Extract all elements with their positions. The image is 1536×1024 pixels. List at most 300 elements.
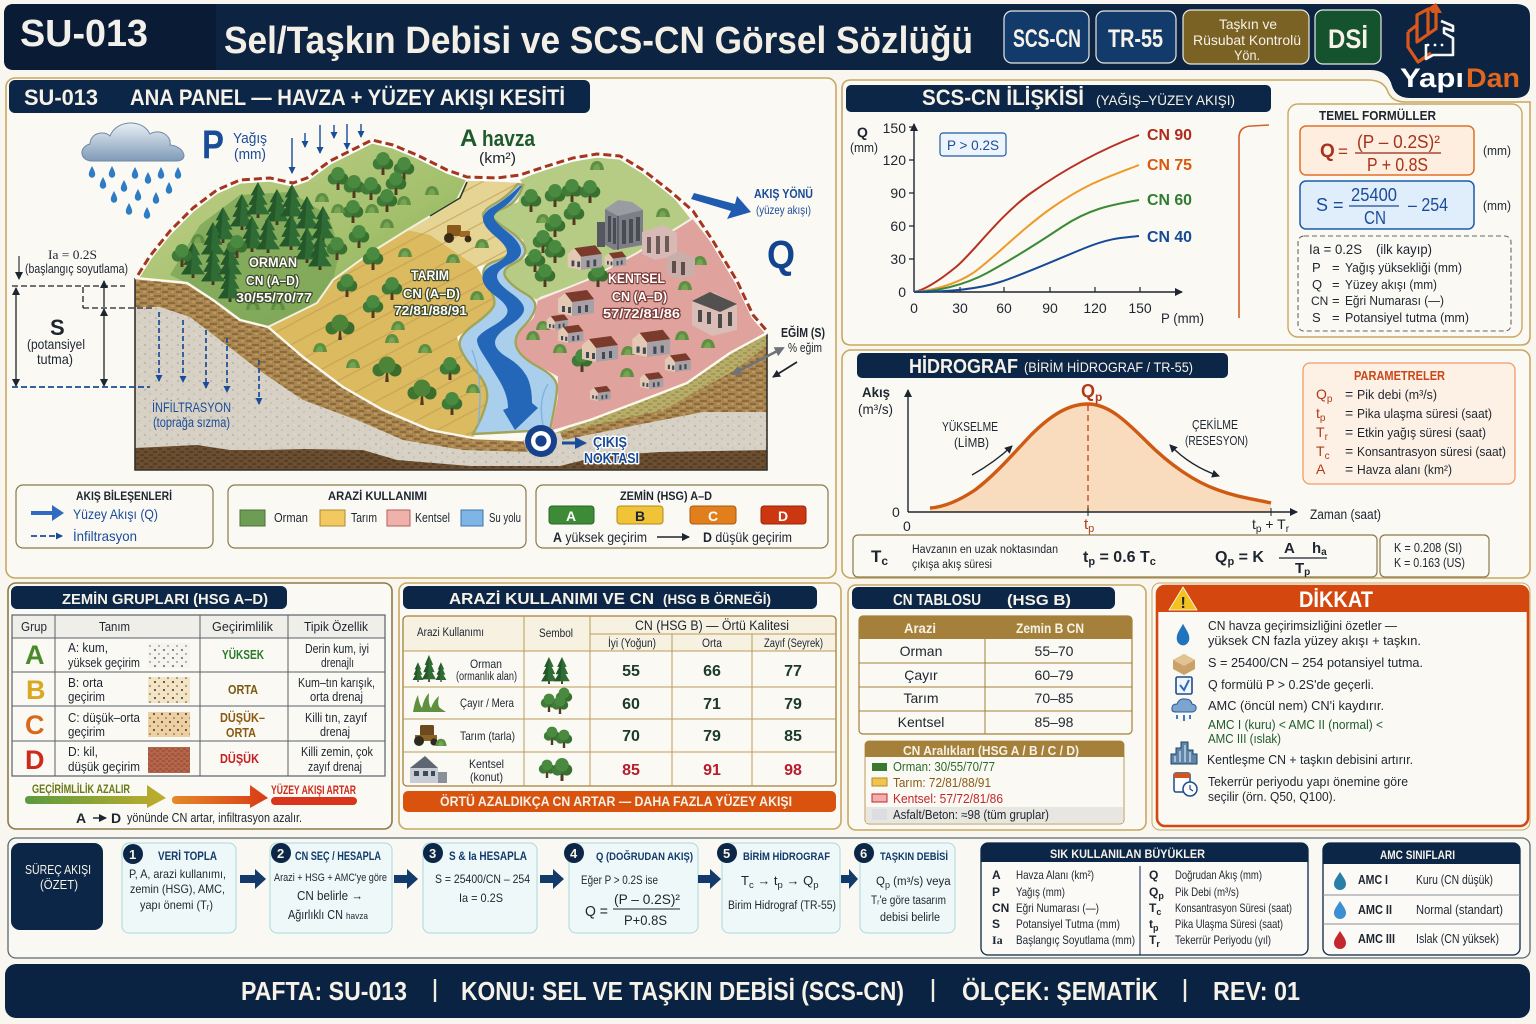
table: soil groups: B: orta [68, 676, 103, 690]
panel heading [852, 587, 1115, 609]
step 5: → Q [783, 873, 813, 888]
land zone: urban [513, 218, 767, 432]
bushes [191, 161, 715, 393]
panel heading [857, 353, 1228, 378]
step 3: Ia = 0.2S [459, 891, 503, 905]
warning item: CN summary [1177, 618, 1421, 648]
flow direction arrow: AKIŞ YÖNÜ [754, 186, 813, 201]
table: soil groups: Kum–tın karışık, [298, 676, 375, 690]
step 4: Eğer P > 0.2S ise [581, 873, 658, 887]
step 5: → t [754, 873, 778, 888]
table: land use CN: 55 [622, 663, 640, 680]
definitions box: = [1332, 260, 1340, 275]
warning item: AMC: AMC I (kuru) < AMC II (normal) < [1208, 718, 1383, 732]
icons: symbols [539, 657, 572, 781]
panel: warning [1152, 583, 1530, 830]
box: equations strip [853, 535, 1377, 578]
formula S: 25400 [1351, 185, 1397, 205]
table: soil groups: Geçirimlilik [212, 619, 273, 634]
table: CN ranges: Arazi [904, 620, 936, 636]
table: common quantities: r [1156, 939, 1160, 949]
rainfall arrows [292, 124, 361, 173]
definitions box: Yüzey akışı (mm) [1345, 277, 1437, 292]
step 4: Q = [585, 903, 608, 920]
line chart: rainfall vs runoff: 0 [898, 284, 906, 300]
table: common quantities: Pik Debi (m³/s) [1175, 885, 1239, 899]
basin boundary red [138, 140, 767, 331]
header bar [4, 3, 1530, 98]
legend: soil groups: ZEMİN (HSG) A–D [620, 488, 712, 503]
table: soil groups: B [26, 675, 46, 705]
step 1: yapı önemi (Tᵣ) [140, 898, 213, 912]
box: parameters: = [1345, 386, 1353, 402]
table: land use CN: 98 [784, 762, 802, 779]
definitions box: = [1332, 310, 1340, 325]
chart: unit hydrograph: YÜKSELME [942, 420, 998, 434]
badge: SCS-CN [1004, 11, 1089, 63]
table: soil groups [12, 615, 385, 776]
step 5: Birim Hidrograf (TR-55) [728, 900, 836, 912]
flow direction arrow: (yüzey akışı) [756, 203, 811, 217]
warning item: return period [1174, 773, 1408, 804]
step 5: BİRİM HİDROGRAF [743, 850, 830, 863]
table: AMC classes: AMC SINIFLARI [1380, 848, 1455, 862]
table: common quantities: CN [992, 901, 1009, 915]
chart: unit hydrograph: (LİMB) [954, 436, 989, 450]
table: land use CN: Zayıf (Seyrek) [764, 638, 823, 650]
table: soil groups: Killi zemin, çok [301, 745, 374, 759]
line chart: rainfall vs runoff: 120 [883, 152, 906, 168]
table: common quantities: Doğrudan Akış (mm) [1175, 868, 1262, 882]
panel: soil groups [8, 583, 392, 829]
table: soil groups: zayıf drenaj [308, 760, 362, 774]
rainfall label P: (mm) [234, 146, 266, 163]
legend: flow components: İnfiltrasyon [73, 527, 137, 544]
box: parameters: = [1345, 461, 1353, 477]
table: AMC classes: AMC II [1358, 902, 1392, 917]
panel heading: (HSG B ÖRNEĞİ) [663, 592, 771, 607]
chart: unit hydrograph: r [1286, 524, 1290, 535]
box: equations strip: p [1304, 567, 1310, 578]
table: common quantities [981, 843, 1308, 955]
step 5: T [741, 873, 749, 888]
line chart: rainfall vs runoff: CN 60 [1147, 192, 1192, 209]
table: common quantities: SIK KULLANILAN BÜYÜKLER [1050, 846, 1205, 861]
step 6: Q [876, 876, 885, 888]
table: land use CN: 70 [622, 728, 640, 745]
badge: guideline: Rüsubat Kontrolü [1193, 32, 1301, 48]
box: equations strip: t [1083, 549, 1088, 566]
table: AMC classes: Normal (standart) [1416, 902, 1503, 917]
table: soil groups: geçirim [68, 690, 105, 704]
abstraction and retention scale: Ia = 0.2S [48, 247, 97, 262]
table: land use CN: Tarım (tarla) [460, 729, 515, 743]
warning item: AMC: AMC (öncül nem) CN'i kaydırır. [1208, 698, 1384, 713]
box: equations strip: T [871, 547, 881, 566]
warning item: S formula [1173, 654, 1423, 675]
legend: soil groups: A [566, 508, 576, 524]
legend: soil groups: D [778, 508, 788, 524]
table: common quantities: A [992, 868, 1001, 882]
definitions box: P [1312, 260, 1321, 275]
box: parameters: Konsantrasyon süresi (saat) [1357, 444, 1506, 459]
formula S: (mm) [1483, 198, 1511, 213]
process title block [11, 843, 103, 930]
panel heading [9, 80, 590, 113]
table: land use CN [403, 616, 836, 786]
formula S: – 254 [1408, 195, 1448, 215]
definitions box: (ilk kayıp) [1376, 242, 1432, 257]
box: parameters: t [1316, 405, 1320, 421]
table: land use CN: Orman [470, 657, 502, 671]
table: soil groups: düşük geçirim [68, 760, 140, 774]
line chart: rainfall vs runoff: Q [857, 124, 868, 140]
sheet code: SU-013 [20, 13, 148, 55]
step 6: p [885, 880, 890, 890]
formula Q: (mm) [1483, 143, 1511, 158]
chart: unit hydrograph: p [1256, 524, 1262, 535]
rainfall label P: P [202, 123, 224, 167]
river [460, 184, 557, 434]
box: parameters: Pik debi (m³/s) [1357, 387, 1437, 402]
logo: YapıDan [1400, 3, 1520, 93]
table: common quantities: Tekerrür Periyodu (yıl) [1175, 933, 1271, 947]
chart: unit hydrograph: ÇEKİLME [1192, 418, 1238, 432]
step 3: S = 25400/CN – 254 [435, 872, 530, 886]
table: soil groups: Killi tın, zayıf [305, 711, 367, 725]
badge: guideline: Taşkın ve [1219, 16, 1277, 32]
box: parameters: A [1316, 461, 1326, 477]
table: CN ranges: 70–85 [1035, 690, 1074, 706]
table: land use CN: 85 [622, 762, 640, 779]
table: common quantities: t [1149, 917, 1153, 931]
table: land use CN: Çayır / Mera [460, 696, 514, 710]
step 4 [564, 843, 698, 933]
warning item: AMC [1172, 698, 1384, 746]
line chart: rainfall vs runoff: CN 90 [1147, 127, 1192, 144]
legend: land use: Kentsel [415, 511, 450, 525]
step 6: TAŞKIN DEBİSİ [880, 850, 948, 863]
panel: hydrograph [842, 350, 1530, 578]
definitions box: S [1312, 310, 1321, 325]
panel: main watershed cross-section [6, 78, 836, 578]
table: CN ranges: Çayır [904, 667, 938, 683]
abstraction and retention scale: S [50, 315, 65, 340]
box: equations strip: T [1295, 560, 1304, 577]
rainfall label P [202, 123, 267, 167]
step 1: zemin (HSG), AMC, [130, 882, 225, 896]
chart: unit hydrograph: t [1252, 516, 1256, 532]
box: equations strip: p [1227, 556, 1234, 568]
zone label: agriculture: CN (A–D) [403, 286, 460, 301]
box: K constants [1380, 535, 1489, 577]
arrow [698, 869, 721, 889]
panel heading: ZEMİN GRUPLARI (HSG A–D) [62, 591, 268, 608]
basin area label [460, 125, 536, 167]
formula S: S = [1316, 195, 1344, 215]
table: soil groups: ORTA [228, 682, 259, 697]
footer bar: KONU: SEL VE TAŞKIN DEBİSİ (SCS-CN) [461, 976, 904, 1006]
definitions box: CN [1311, 294, 1328, 308]
icon: tractor [444, 225, 471, 243]
step 2: CN belirle → [297, 889, 363, 903]
table: common quantities: Q [1149, 885, 1158, 899]
table: CN ranges: Orman [900, 643, 942, 659]
icons: land use [410, 655, 447, 783]
land zone: agriculture [268, 180, 518, 438]
footer bar: REV: 01 [1213, 976, 1300, 1006]
box: parameters: Havza alanı (km²) [1357, 462, 1452, 477]
box: K constants: K = 0.163 (US) [1394, 556, 1465, 570]
chart: unit hydrograph: Q [1081, 381, 1095, 401]
line chart: rainfall vs runoff: 90 [890, 185, 906, 201]
table: land use CN: Arazi Kullanımı [417, 627, 484, 639]
process title block: (ÖZET) [40, 877, 78, 892]
round trees [172, 152, 608, 415]
table: common quantities: Başlangıç Soyutlama (mm) [1016, 933, 1135, 947]
table: land use CN: CN (HSG B) — Örtü Kalitesi [635, 618, 789, 633]
badge: DSI [1315, 10, 1381, 64]
line chart: rainfall vs runoff: 90 [1042, 300, 1058, 316]
annotation: condition [940, 133, 1006, 156]
zone label: agriculture: TARIM [411, 267, 449, 283]
basin area label: (km²) [479, 150, 516, 167]
step 3: S & Ia HESAPLA [449, 851, 527, 863]
table: soil groups: C [25, 710, 44, 740]
zone label: forest: 30/55/70/77 [236, 290, 312, 305]
table: common quantities: c [1156, 907, 1161, 917]
zone label: urban: KENTSEL [608, 270, 665, 286]
runoff label Q: Q [767, 233, 795, 277]
table: land use CN: 85 [784, 728, 802, 745]
table: soil groups: A: kum, [68, 641, 108, 655]
table: land use CN: 79 [703, 728, 721, 745]
infiltration arrows and label [152, 312, 259, 430]
step 5: p [813, 880, 818, 891]
warning item: S formula: S = 25400/CN – 254 potansiyel tutma. [1208, 655, 1423, 670]
step 1: P, A, arazi kullanımı, [129, 867, 226, 881]
flow direction arrow [691, 186, 813, 219]
panel heading [403, 586, 817, 609]
heading: DİKKAT [1299, 587, 1374, 612]
table: soil groups: A [25, 640, 44, 670]
table: soil groups: drenaj [320, 725, 350, 739]
box: CN ranges by group: Orman: 30/55/70/77 [893, 760, 995, 774]
urban buildings [547, 200, 737, 401]
abstraction and retention scale: (başlangıç soyutlama) [25, 262, 128, 276]
warning item: AMC: AMC III (ıslak) [1208, 732, 1281, 746]
footer bar [5, 964, 1530, 1018]
abstraction and retention scale: tutma) [37, 351, 73, 367]
outlet point: ÇIKIŞ [593, 434, 627, 451]
infiltration arrows and label: İNFİLTRASYON [152, 398, 231, 415]
box: parameters: = [1345, 443, 1353, 459]
step 4: 4 [570, 846, 578, 861]
line chart: rainfall vs runoff: (mm) [850, 140, 878, 155]
badge: DSI: DSİ [1328, 24, 1368, 54]
box: basic formulas: TEMEL FORMÜLLER [1319, 108, 1437, 123]
step 6 [854, 843, 955, 933]
table: common quantities: Ia [992, 933, 1003, 947]
land zone: forest [135, 142, 467, 327]
warning item: Q validity: Q formülü P > 0.2S'de geçerli. [1208, 677, 1374, 692]
step 2: 2 [277, 846, 284, 861]
table: land use CN: 77 [784, 663, 802, 680]
step 2: Ağırlıklı CN havza [288, 908, 369, 922]
legend: land use: Su yolu [489, 511, 521, 525]
box: equations strip: c [881, 554, 888, 568]
main title: Sel/Taşkın Debisi ve SCS-CN Görsel Sözlüğü [224, 20, 973, 62]
definitions box: Potansiyel tutma (mm) [1345, 310, 1469, 325]
table: land use CN: Orta [702, 638, 723, 650]
panel heading [11, 586, 287, 609]
box: parameters: r [1325, 432, 1329, 443]
table: soil groups: D [25, 745, 44, 775]
table: soil groups: yüksek geçirim [68, 656, 140, 670]
chart: unit hydrograph: + T [1261, 516, 1286, 532]
line chart: rainfall vs runoff: 30 [952, 300, 968, 316]
warning item: CN summary: CN havza geçirimsizliğini özetler — [1208, 618, 1397, 633]
box: equations strip: Havzanın en uzak noktasından [912, 544, 1058, 556]
box: parameters: = [1345, 424, 1353, 440]
box: K constants: K = 0.208 (SI) [1394, 541, 1462, 555]
illustration: watershed terrain [135, 140, 767, 470]
box: parameters: Q [1316, 386, 1327, 402]
legend: land use [228, 485, 526, 548]
legend: flow components [16, 485, 213, 548]
land zone: upper green right [492, 156, 693, 300]
line chart: rainfall vs runoff: 30 [890, 251, 906, 267]
line chart: rainfall vs runoff: 0 [910, 300, 918, 316]
step 1 [122, 843, 236, 933]
box: parameters: T [1316, 424, 1325, 440]
zone label: forest: CN (A–D) [246, 273, 299, 288]
panel heading: SU-013 [24, 85, 98, 110]
note: A to D: yönünde CN artar, infiltrasyon azalır. [127, 811, 302, 825]
step 6: (m³/s) veya [890, 876, 951, 888]
legend: soil groups: D düşük geçirim [703, 530, 792, 545]
step 4: P+0.8S [624, 912, 667, 928]
box: parameters [1303, 363, 1515, 484]
logo: YapıDan: Dan [1466, 63, 1520, 93]
panel heading: HİDROGRAF [909, 355, 1018, 378]
step 2: Arazi + HSG + AMC'ye göre [274, 872, 387, 884]
box: CN ranges by group: CN Aralıkları (HSG A / B / C / D) [903, 743, 1079, 758]
footer bar: PAFTA: SU-013 [241, 976, 407, 1006]
table: common quantities: Potansiyel Tutma (mm) [1016, 917, 1120, 931]
box: equations strip: h [1312, 540, 1321, 557]
icon: rain cloud with drops [82, 123, 184, 219]
arrows: permeability and runoff: GEÇİRİMLİLİK AZALIR [32, 783, 131, 796]
definitions box [1298, 236, 1511, 331]
step 6: debisi belirle [880, 912, 940, 924]
table: CN ranges: 85–98 [1035, 714, 1074, 730]
soil cross-section [135, 278, 767, 470]
badge: SCS-CN: SCS-CN [1013, 25, 1081, 53]
table: common quantities: S [992, 917, 1000, 931]
note: A to D: A [76, 810, 86, 826]
chart: unit hydrograph: p [1088, 523, 1094, 535]
line chart: rainfall vs runoff: CN 75 [1147, 157, 1192, 174]
step 4: (P – 0.2S)² [614, 891, 680, 907]
table: soil groups: orta drenaj [310, 690, 363, 704]
rainfall label P: Yağış [233, 130, 267, 147]
formula S [1300, 181, 1511, 229]
icon: warning triangle [1169, 587, 1197, 612]
formula S: CN [1364, 208, 1386, 228]
step 3: 3 [429, 846, 436, 861]
chart: unit hydrograph: p [1095, 390, 1102, 404]
box: equations strip: Q [1215, 549, 1227, 566]
legend: soil groups [536, 485, 828, 548]
arrows: permeability and runoff [25, 783, 357, 808]
table: AMC classes [1323, 843, 1520, 955]
table: CN ranges: Kentsel [898, 714, 944, 730]
table: CN ranges: Tarım [904, 690, 938, 706]
chart: unit hydrograph: Akış [862, 384, 890, 400]
panel heading: (BİRİM HİDROGRAF / TR-55) [1024, 358, 1193, 375]
zone label: forest [236, 254, 312, 305]
abstraction and retention scale: (potansiyel [27, 336, 85, 352]
chart: unit hydrograph: 0 [903, 518, 911, 534]
step 1: VERİ TOPLA [158, 850, 217, 863]
table: land use CN: (ormanlık alan) [456, 671, 517, 683]
table: soil groups: DÜŞÜK [220, 751, 260, 766]
box: parameters: p [1327, 394, 1333, 405]
line chart: rainfall vs runoff: 150 [883, 120, 906, 136]
definitions box: Ia = 0.2S [1309, 241, 1362, 257]
table: soil groups: ORTA [226, 725, 257, 740]
table: common quantities: Konsantrasyon Süresi (saat) [1175, 901, 1292, 915]
box: CN ranges by group [865, 741, 1124, 824]
table: common quantities: P [992, 885, 1000, 899]
legend: land use: Tarım [351, 511, 377, 525]
box: equations strip: a [1321, 547, 1327, 558]
warning item: urbanisation: Kentleşme CN + taşkın debisini artırır. [1207, 752, 1413, 767]
warning item: return period: Tekerrür periyodu yapı önemine göre [1208, 774, 1408, 789]
surface white edge [135, 278, 767, 440]
warning item: return period: seçilir (örn. Q50, Q100). [1208, 789, 1336, 804]
formula Q [1300, 126, 1511, 175]
panel heading: (HSG B) [1007, 592, 1071, 609]
table: CN ranges: Zemin B CN [1016, 620, 1084, 636]
table: AMC classes: Kuru (CN düşük) [1416, 872, 1493, 887]
box: equations strip: = 0.6 T [1095, 549, 1150, 566]
table: soil groups: geçirim [68, 725, 105, 739]
annotation: condition: P > 0.2S [947, 137, 999, 153]
definitions box: = [1332, 277, 1340, 292]
formula Q: P + 0.8S [1367, 155, 1428, 175]
logo: YapıDan: Yapı [1400, 63, 1464, 93]
table: soil groups: drenajlı [321, 656, 354, 670]
table: common quantities: p [1153, 923, 1159, 933]
box: equations strip: = K [1234, 549, 1264, 566]
table: soil groups: Tipik Özellik [304, 619, 368, 634]
warning item: CN summary: yüksek CN fazla yüzey akışı + taşkın. [1208, 633, 1421, 648]
basin area label: havza [482, 126, 536, 151]
table: common quantities: p [1158, 891, 1164, 901]
callout: cover and CN: ÖRTÜ AZALDIKÇA CN ARTAR — DAHA FAZLA YÜZEY AKIŞI [440, 794, 792, 809]
zone label: agriculture: 72/81/88/91 [394, 303, 467, 318]
panel heading: ARAZİ KULLANIMI VE CN [449, 590, 654, 608]
table: land use CN: 79 [784, 696, 802, 713]
zone label: forest: ORMAN [249, 254, 297, 270]
table: common quantities: T [1149, 901, 1156, 915]
arrow [540, 869, 564, 889]
table: common quantities: Pika Ulaşma Süresi (saat) [1175, 917, 1283, 931]
arrow [394, 869, 418, 889]
step 2 [270, 843, 392, 933]
